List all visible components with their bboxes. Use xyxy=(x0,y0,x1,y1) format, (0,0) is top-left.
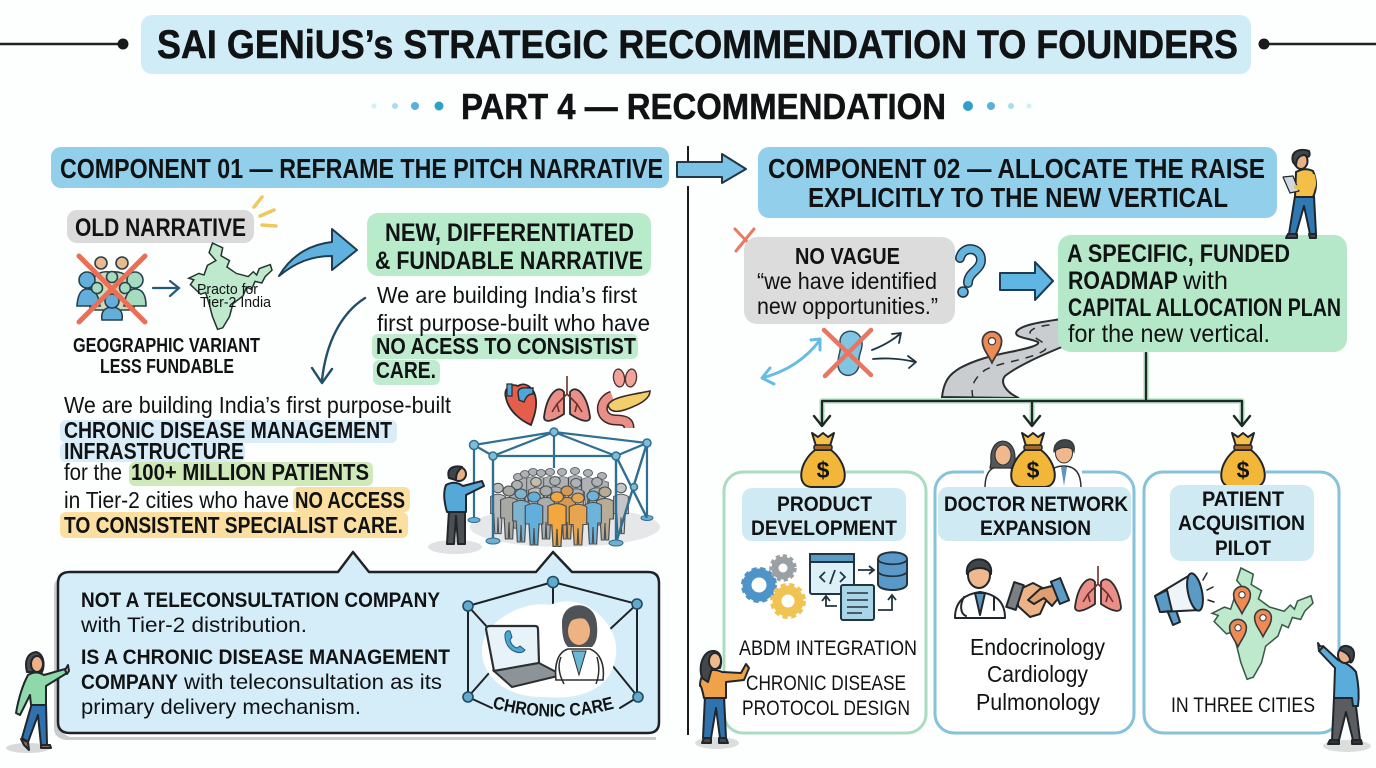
icon: crossed-out crowd xyxy=(77,256,146,322)
old narrative caption xyxy=(73,335,260,378)
card: product development xyxy=(724,433,926,733)
presenter xyxy=(444,466,484,544)
card text: IN THREE CITIES xyxy=(1171,694,1315,717)
card: doctor network expansion xyxy=(935,433,1134,733)
roadmap box: ROADMAP xyxy=(1068,267,1178,295)
icon: winding road with pin xyxy=(942,319,1064,398)
rear frame xyxy=(474,432,647,518)
card heading: PATIENT xyxy=(1202,488,1284,511)
callout text: with Tier-2 distribution. xyxy=(80,614,307,637)
card: patient acquisition pilot xyxy=(1144,433,1339,733)
person: woman in orange xyxy=(695,651,749,749)
arrow: new narrative down xyxy=(312,298,365,383)
positioning statement: for the xyxy=(64,459,122,485)
doctor xyxy=(556,605,603,684)
icon: money bag xyxy=(1221,433,1265,487)
icon: heart xyxy=(505,384,536,425)
new narrative label xyxy=(367,213,651,276)
new narrative draft text: first purpose-built who have xyxy=(377,310,650,336)
card heading: DOCTOR NETWORK xyxy=(944,493,1128,516)
icon: doctors behind money bag xyxy=(985,433,1081,488)
title banner: SAI GENiUS’s STRATEGIC RECOMMENDATION TO FOUNDERS xyxy=(157,23,1238,67)
heading: component 02 xyxy=(758,147,1277,218)
panel: component 02 xyxy=(695,147,1371,752)
subtitle: PART 4 — RECOMMENDATION xyxy=(461,86,946,127)
connector tree xyxy=(814,353,1250,426)
icon: india map practo: Tier-2 India xyxy=(200,294,272,311)
icon: dev gears and system xyxy=(743,552,907,620)
card heading: PRODUCT xyxy=(777,493,872,516)
new narrative label: NEW, DIFFERENTIATED xyxy=(385,219,634,247)
callout text: NOT A TELECONSULTATION COMPANY xyxy=(81,589,440,612)
positioning statement: in Tier-2 cities who have xyxy=(64,487,289,513)
callout text: primary delivery mechanism. xyxy=(81,696,361,719)
icon: megaphone xyxy=(1155,572,1214,625)
illustration: crowd under infrastructure xyxy=(428,428,660,554)
icon: thyroid and pancreas xyxy=(602,368,650,428)
front frame xyxy=(493,443,647,543)
card heading: DEVELOPMENT xyxy=(751,517,897,540)
icon: handshake xyxy=(1006,578,1069,617)
icon: question mark xyxy=(958,249,981,297)
callout text: with teleconsultation as its xyxy=(183,671,442,694)
no vague box xyxy=(744,237,955,324)
card heading: ACQUISITION xyxy=(1178,512,1305,535)
card heading xyxy=(1170,485,1314,561)
person: man with clipboard xyxy=(1283,150,1316,238)
heading: component 01: COMPONENT 01 — REFRAME THE PITCH NARRATIVE xyxy=(60,153,663,184)
arrow: crowd to map xyxy=(153,281,179,296)
card text: ABDM INTEGRATION xyxy=(739,637,917,660)
icon: money bag: $ xyxy=(1237,457,1250,483)
title banner xyxy=(0,15,1376,74)
new narrative draft text: We are building India’s first xyxy=(377,282,638,308)
roadmap box: with xyxy=(1182,267,1228,295)
card text xyxy=(970,634,1105,715)
roadmap box: A SPECIFIC, FUNDED xyxy=(1067,240,1290,268)
callout text xyxy=(80,589,450,719)
chronic care label: CHRONIC CARE xyxy=(494,696,614,717)
roadmap box: for the new vertical. xyxy=(1068,320,1270,348)
crowd xyxy=(491,468,628,546)
positioning statement: NO ACCESS xyxy=(295,487,405,513)
old narrative label: OLD NARRATIVE xyxy=(75,214,246,242)
positioning statement: INFRASTRUCTURE xyxy=(64,438,244,464)
arrow: vague to roadmap xyxy=(1000,262,1053,300)
icon: money bag xyxy=(801,433,845,487)
heading: component 02: EXPLICITLY TO THE NEW VERTICAL xyxy=(808,182,1228,213)
icon: doctor xyxy=(955,559,1005,618)
panel: component 01 xyxy=(6,147,669,753)
person: man in blue pointing up xyxy=(1318,643,1371,752)
new narrative draft text: CARE. xyxy=(376,357,436,383)
positioning statement xyxy=(60,392,452,538)
center divider xyxy=(687,146,689,735)
icon: lungs xyxy=(544,376,590,421)
icon: india map practo xyxy=(189,243,272,329)
new narrative draft text xyxy=(372,282,650,385)
chronic care network icon xyxy=(462,576,644,717)
card heading: EXPANSION xyxy=(980,517,1091,540)
old narrative caption: GEOGRAPHIC VARIANT xyxy=(73,335,260,357)
no vague box: NO VAGUE xyxy=(795,243,900,269)
heading: component 01 xyxy=(51,147,669,188)
card text xyxy=(739,637,917,720)
card heading xyxy=(742,488,906,541)
icon: money bag: $ xyxy=(817,457,830,483)
icon: lungs xyxy=(1075,566,1121,611)
heading: component 02: COMPONENT 02 — ALLOCATE THE RAISE xyxy=(768,153,1265,184)
roadmap box xyxy=(1058,235,1347,352)
icon: scattered arrows crossed out xyxy=(762,330,916,384)
icon: india map with pins xyxy=(1212,568,1313,679)
positioning statement: CHRONIC DISEASE MANAGEMENT xyxy=(64,417,392,443)
card text: Cardiology xyxy=(987,661,1088,687)
card text: Pulmonology xyxy=(976,689,1100,715)
icon: doctors behind money bag: $ xyxy=(1027,457,1040,483)
arrow: old to new xyxy=(279,229,357,276)
card heading xyxy=(938,487,1131,541)
no vague box: “we have identified xyxy=(757,268,937,294)
callout panel xyxy=(54,550,660,740)
new narrative draft text: NO ACESS TO CONSISTIST xyxy=(376,333,636,359)
card text: Endocrinology xyxy=(970,634,1105,660)
old narrative caption: LESS FUNDABLE xyxy=(100,356,234,378)
person: woman in green pointing xyxy=(6,652,69,753)
callout text: COMPANY xyxy=(81,671,178,694)
old narrative label xyxy=(67,197,276,243)
no vague box: new opportunities.” xyxy=(757,293,938,319)
positioning statement: We are building India’s first purpose-built xyxy=(64,392,452,418)
card text: PROTOCOL DESIGN xyxy=(742,697,910,720)
card text: CHRONIC DISEASE xyxy=(746,672,906,695)
positioning statement: TO CONSISTENT SPECIALIST CARE. xyxy=(64,512,403,538)
laptop xyxy=(486,626,539,671)
positioning statement: 100+ MILLION PATIENTS xyxy=(131,459,369,485)
new narrative label: & FUNDABLE NARRATIVE xyxy=(375,247,643,275)
red cross mark xyxy=(735,229,755,251)
callout text: IS A CHRONIC DISEASE MANAGEMENT xyxy=(81,646,450,669)
card heading: PILOT xyxy=(1215,537,1271,560)
arrow between components xyxy=(677,154,746,183)
icon: india map practo: Practo for xyxy=(197,281,258,298)
